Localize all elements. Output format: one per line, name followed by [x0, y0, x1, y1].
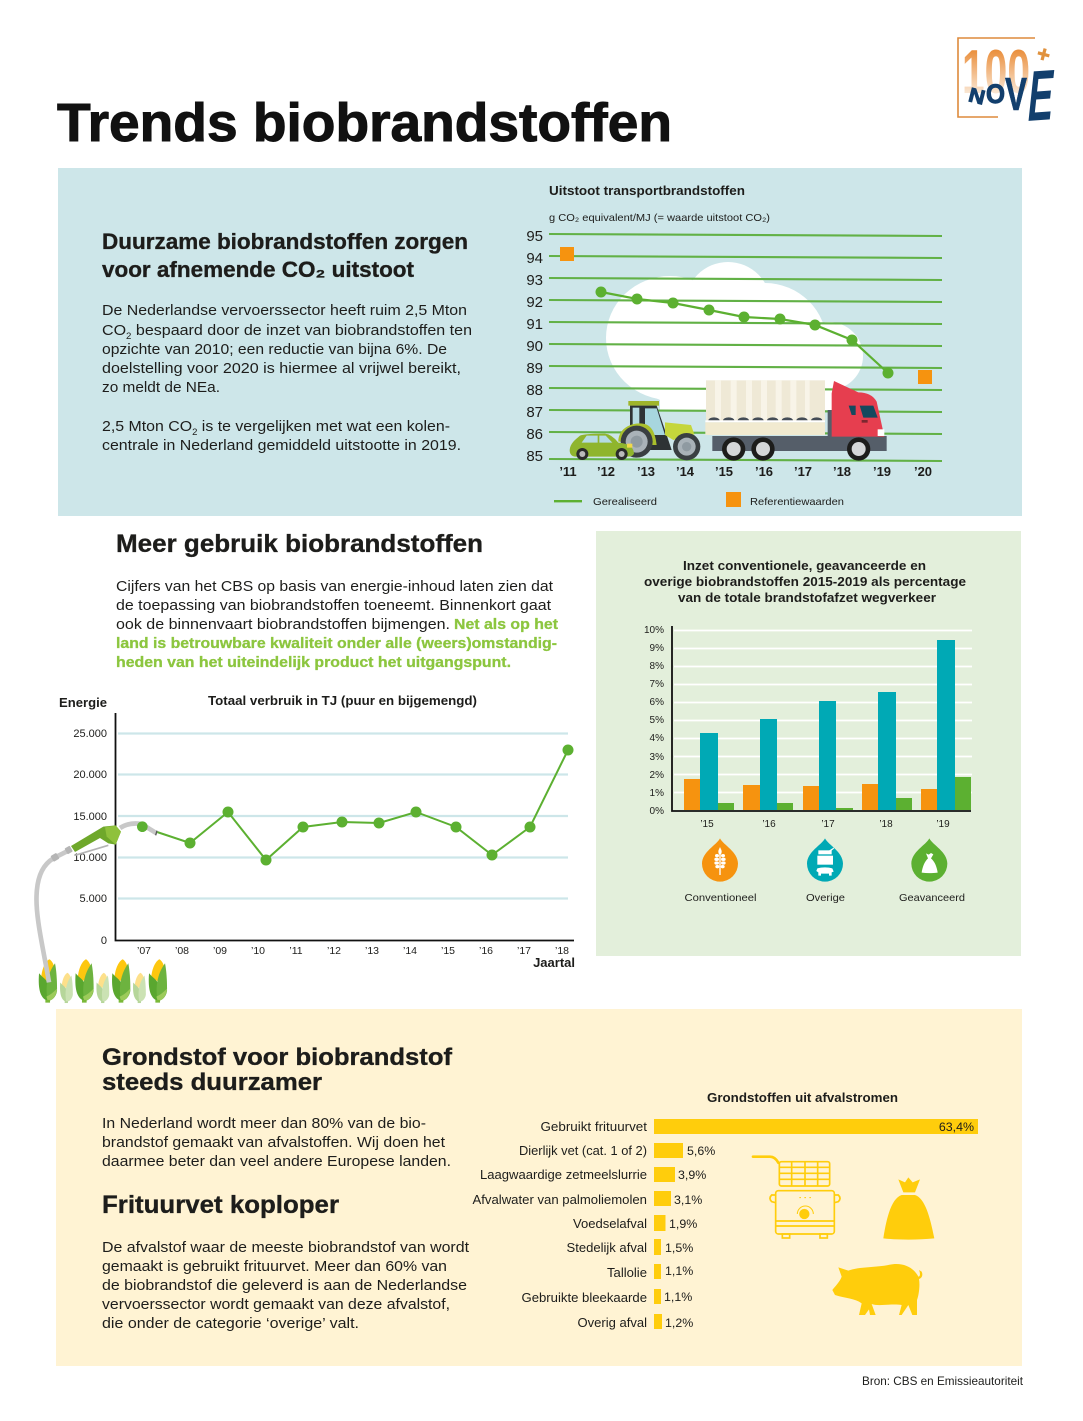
data line: totaal verbruik: [142, 744, 574, 866]
category labels: Laagwaardige zetmeelslurrie: [480, 1167, 647, 1182]
chart: uitstoot transportbrandstoffen: Uitstoot transportbrandstoffen: [549, 183, 745, 198]
values: 5,6%: [687, 1144, 715, 1158]
x axis labels: ’16: [479, 945, 493, 957]
panel: inzet biobrandstoffen: [596, 531, 1021, 956]
y axis labels: 88: [526, 382, 543, 399]
values: 1,1%: [664, 1290, 692, 1304]
icon: conventioneel drop: [702, 838, 738, 882]
text block: frituurvet: De afvalstof waar de meeste biobrandstof van wordt: [102, 1239, 470, 1256]
text block: cijfers CBS: ook de binnenvaart biobrandstoffen bijmengen.: [116, 616, 450, 633]
x axis labels: ’13: [365, 945, 379, 957]
y axis labels: 5.000: [79, 893, 107, 905]
x axis labels: [559, 464, 932, 479]
chart title: overige biobrandstoffen 2015-2019 als percentage: [644, 575, 966, 589]
x axis labels: ’14: [403, 945, 417, 957]
y axis labels: 1%: [650, 788, 664, 799]
icon: overige drop: [807, 838, 843, 882]
x axis labels: ’17: [821, 819, 835, 830]
y axis labels: 0: [101, 935, 107, 947]
category labels: Overig afval: [578, 1315, 647, 1330]
logo: 100+ NOVE: V: [1005, 68, 1027, 120]
y axis labels: 9%: [650, 643, 664, 654]
legend: Gerealiseerd: [593, 496, 657, 508]
logo: 100+ NOVE: O: [986, 79, 1005, 109]
x axis labels: ’18: [879, 819, 893, 830]
category labels: [472, 1119, 647, 1330]
chart: totaal verbruik: Totaal verbruik in TJ (puur en bijgemengd): [208, 693, 477, 708]
x axis labels: ’18: [555, 945, 569, 957]
x axis labels: ’19: [873, 464, 891, 479]
x axis labels: ’12: [597, 464, 615, 479]
category labels: Tallolie: [607, 1265, 647, 1280]
x axis labels: ’19: [936, 819, 950, 830]
title: Trends biobrandstoffen: [57, 93, 672, 153]
data line: gerealiseerd: [596, 286, 894, 378]
heading: frituurvet koploper: Frituurvet koploper: [102, 1191, 339, 1219]
y axis labels: [644, 625, 664, 817]
y axis labels: 95: [526, 228, 543, 245]
y axis labels: 85: [526, 448, 543, 465]
text block: vervoerssector: 2: [126, 331, 131, 341]
y axis labels: 90: [526, 338, 543, 355]
legend labels: Overige: [806, 892, 845, 904]
y axis labels: 3%: [650, 752, 664, 763]
legend labels: [684, 892, 965, 904]
chart: totaal verbruik: [36, 693, 575, 1003]
x axis labels: ’16: [755, 464, 773, 479]
x axis labels: ’20: [914, 464, 932, 479]
logo: 100+ NOVE: [958, 38, 1058, 137]
x axis labels: ’18: [833, 464, 851, 479]
logo: 100+ NOVE: N: [966, 84, 987, 110]
text block: afvalstoffen: daarmee beter dan veel andere Europese landen.: [102, 1153, 451, 1170]
legend labels: Conventioneel: [684, 892, 756, 904]
values: 3,1%: [674, 1193, 702, 1207]
text block: vervoerssector: bespaard door de inzet van biobrandstoffen ten: [131, 322, 472, 339]
text block: cijfers CBS: Net als op het: [454, 616, 558, 633]
y axis labels: 92: [526, 294, 543, 311]
text block: cijfers CBS: de toepassing van biobrandstoffen toeneemt. Binnenkort gaat: [116, 597, 552, 614]
logo: 100+ NOVE: E: [1024, 55, 1058, 137]
y axis labels: 86: [526, 426, 543, 443]
x axis labels: ’15: [700, 819, 714, 830]
chart title: Inzet conventionele, geavanceerde en: [683, 559, 926, 573]
bars: overige: [700, 640, 955, 810]
x axis labels: [137, 945, 569, 957]
illustration: cloud: [606, 262, 863, 410]
chart title: van de totale brandstofafzet wegverkeer: [678, 591, 936, 605]
x axis labels: ’15: [715, 464, 733, 479]
panel: duurzame biobrandstoffen: [58, 168, 1022, 516]
illustration: corn: [39, 959, 167, 1003]
x axis labels: ’16: [762, 819, 776, 830]
y axis labels: 94: [526, 250, 543, 267]
chart: grondstoffen uit afvalstromen: [472, 1090, 978, 1330]
y axis labels: 10%: [644, 625, 664, 636]
values: 3,9%: [678, 1168, 706, 1182]
text block: frituurvet: die onder de categorie ‘overige’ valt.: [102, 1315, 359, 1332]
chart: totaal verbruik: Energie: [59, 695, 107, 710]
y axis labels: 87: [526, 404, 543, 421]
logo: 100+ NOVE: 100: [962, 38, 1030, 107]
x axis labels: ’08: [175, 945, 189, 957]
illustration: car: [570, 434, 634, 460]
text block: vervoerssector: opzichte van 2010; een reductie van bijna 6%. De: [102, 341, 447, 358]
text block: frituurvet: de biobrandstof die geleverd is aan de Nederlandse: [102, 1277, 467, 1294]
x axis labels: ’07: [137, 945, 151, 957]
values: 1,9%: [669, 1217, 697, 1231]
text block: vervoerssector: 2: [192, 427, 197, 437]
category labels: Stedelijk afval: [566, 1240, 647, 1255]
y axis labels: 2%: [650, 770, 664, 781]
panel: meer gebruik biobrandstoffen: [36, 530, 575, 1003]
chart title: [644, 559, 966, 605]
x axis labels: ’17: [517, 945, 531, 957]
x axis labels: ’09: [213, 945, 227, 957]
text block: vervoerssector: doelstelling voor 2020 is hiermee al vrijwel bereikt,: [102, 360, 461, 377]
x axis labels: ’12: [327, 945, 341, 957]
chart: grondstoffen uit afvalstromen: Grondstoffen uit afvalstromen: [707, 1090, 898, 1105]
x axis labels: ’10: [251, 945, 265, 957]
data points: referentiewaarden: [560, 247, 932, 384]
icon: bag: [883, 1177, 934, 1240]
y axis labels: [73, 728, 107, 947]
chart: totaal verbruik: Jaartal: [533, 955, 575, 970]
legend labels: Geavanceerd: [899, 892, 965, 904]
illustration: truck: [705, 380, 887, 461]
heading: afnemende CO2 uitstoot: Duurzame biobrandstoffen zorgen: [102, 229, 468, 254]
legend: [554, 492, 844, 508]
x axis labels: ’13: [637, 464, 655, 479]
text block: vervoerssector: centrale in Nederland gemiddeld uitstootte in 2019.: [102, 437, 461, 454]
category labels: Voedselafval: [573, 1216, 647, 1231]
y axis labels: 8%: [650, 661, 664, 672]
text block: cijfers CBS: Cijfers van het CBS op basis van energie-inhoud laten zien dat: [116, 578, 554, 595]
panel: grondstof voor biobrandstof: [56, 1009, 1022, 1366]
x axis labels: ’14: [676, 464, 695, 479]
y axis labels: 5%: [650, 715, 664, 726]
icon: pig: [832, 1264, 922, 1315]
bars: [654, 1119, 978, 1329]
bar chart: percentage brandstofafzet: [644, 625, 972, 830]
x axis labels: ’11: [559, 464, 577, 479]
illustration: fuel nozzle and hose: [36, 821, 157, 982]
x axis labels: ’11: [289, 945, 303, 957]
bars: conventioneel: [684, 779, 937, 810]
icon: fryer: [753, 1157, 840, 1238]
category labels: Gebruikt frituurvet: [540, 1119, 647, 1134]
y axis labels: 20.000: [73, 769, 107, 781]
text block: cijfers CBS: heden van het uiteindelijk product het uitgangspunt.: [116, 654, 511, 671]
category labels: Dierlijk vet (cat. 1 of 2): [519, 1143, 647, 1158]
heading: afnemende CO2 uitstoot: voor afnemende CO₂ uitstoot: [102, 257, 415, 282]
text block: vervoerssector: zo meldt de NEa.: [102, 379, 220, 396]
bars: geavanceerd: [718, 777, 971, 810]
source note: Bron: CBS en Emissieautoriteit: [862, 1374, 1024, 1388]
x axis labels: ’17: [794, 464, 812, 479]
text block: vervoerssector: 2,5 Mton CO: [102, 418, 187, 435]
text block: vervoerssector: is te vergelijken met wat een kolen-: [197, 418, 450, 435]
values: 63,4%: [939, 1120, 974, 1134]
chart: uitstoot transportbrandstoffen: [526, 183, 942, 508]
y axis labels: 15.000: [73, 811, 107, 823]
illustration: tractor: [618, 401, 700, 460]
text block: afvalstoffen: In Nederland wordt meer dan 80% van de bio-: [102, 1115, 426, 1132]
text block: frituurvet: [102, 1239, 470, 1332]
y axis labels: 10.000: [73, 852, 107, 864]
values: 1,5%: [665, 1241, 693, 1255]
legend: Referentiewaarden: [750, 496, 844, 508]
category labels: Gebruikte bleekaarde: [522, 1290, 647, 1305]
text block: cijfers CBS: [116, 578, 558, 671]
y axis labels: 89: [526, 360, 543, 377]
heading: meer gebruik: Meer gebruik biobrandstoffen: [116, 530, 483, 558]
y axis labels: 4%: [650, 733, 664, 744]
x axis labels: ’15: [441, 945, 455, 957]
text block: afvalstoffen: brandstof gemaakt van afvalstoffen. Wij doen het: [102, 1134, 446, 1151]
text block: vervoerssector: [102, 302, 472, 454]
x axis labels: [700, 819, 950, 830]
values: [664, 1120, 974, 1330]
heading: grondstof: [102, 1044, 453, 1096]
y axis labels: 91: [526, 316, 543, 333]
logo: 100+ NOVE: +: [1034, 40, 1053, 68]
y axis labels: 7%: [650, 679, 664, 690]
text block: vervoerssector: CO: [102, 322, 124, 339]
text block: cijfers CBS: land is betrouwbare kwaliteit onder alle (weers)omstandig-: [116, 635, 557, 652]
y axis labels: 93: [526, 272, 543, 289]
text block: afvalstoffen: [102, 1115, 451, 1170]
heading: grondstof: steeds duurzamer: [102, 1069, 322, 1096]
chart: uitstoot transportbrandstoffen: g CO₂ equivalent/MJ (= waarde uitstoot CO₂): [549, 212, 770, 224]
text block: vervoerssector: De Nederlandse vervoerssector heeft ruim 2,5 Mton: [102, 302, 467, 319]
values: 1,2%: [665, 1316, 693, 1330]
category labels: Afvalwater van palmoliemolen: [472, 1192, 647, 1207]
values: 1,1%: [665, 1264, 693, 1278]
heading: afnemende CO2 uitstoot: [102, 229, 468, 282]
heading: grondstof: Grondstof voor biobrandstof: [102, 1044, 453, 1071]
icon: geavanceerd drop: [911, 838, 947, 882]
y axis labels: 25.000: [73, 728, 107, 740]
text block: frituurvet: gemaakt is gebruikt frituurvet. Meer dan 60% van: [102, 1258, 447, 1275]
text block: frituurvet: vervoerssector wordt gemaakt van deze afvalstof,: [102, 1296, 450, 1313]
y axis labels: [526, 228, 543, 465]
y axis labels: 6%: [650, 697, 664, 708]
y axis labels: 0%: [650, 806, 664, 817]
